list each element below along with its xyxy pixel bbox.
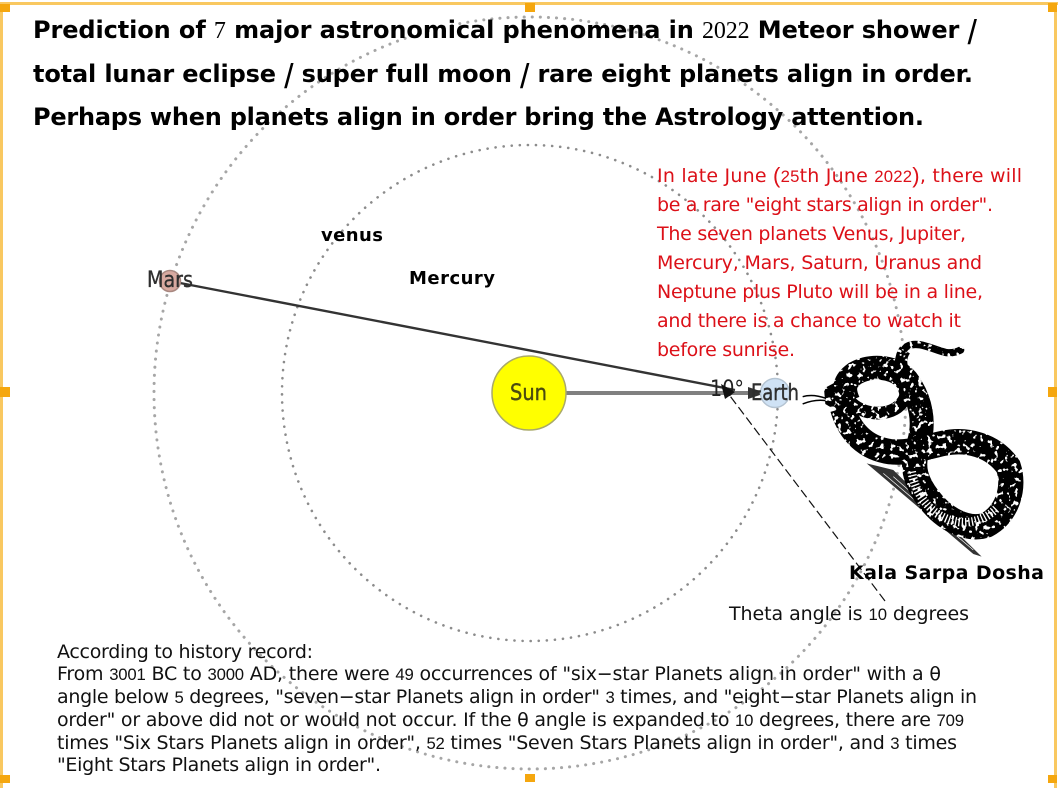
upper coil (845, 368, 922, 443)
red description text: before sunrise. (657, 339, 795, 361)
title: total lunar eclipse (33, 60, 276, 88)
line: Sun to Earth (566, 387, 766, 399)
red description text: The seven planets Venus, Jupiter, (656, 223, 966, 245)
red description text: ) (912, 163, 920, 188)
dashed pointer arrow to angle (721, 384, 885, 601)
red description text: be a rare "eight stars align in order". (657, 194, 993, 216)
title: / (284, 58, 294, 96)
title: Prediction of 7 major astronomical phenomena in 2022 Meteor shower (33, 16, 959, 44)
red description text: In late June (657, 165, 767, 187)
red description text: 25 (781, 167, 799, 186)
red description text: Mercury, Mars, Saturn, Uranus and (657, 252, 982, 274)
red description text: Neptune plus Pluto will be in a line, (657, 281, 983, 303)
history text block: angle below 5 degrees, "seven−star Planets align in order" 3 times, and "eight−star Planets align in (57, 686, 977, 708)
inner thin ring (847, 387, 906, 413)
label: Kala Sarpa Dosha: Kala Sarpa Dosha (849, 562, 1044, 584)
title: super full moon (293, 60, 520, 88)
ventral fringe (867, 463, 982, 557)
history text block: times "Six Stars Planets align in order", 52 times "Seven Stars Planets align in order", and 3 times (57, 732, 957, 754)
red description text: , there will (920, 165, 1022, 187)
planet: Mars: Mars (147, 268, 193, 293)
inner orbit: mercury (282, 145, 778, 641)
belly scales (912, 472, 997, 522)
history text block: From 3001 BC to 3000 AD, there were 49 occurrences of "six−star Planets align in order" with a θ (57, 663, 941, 685)
label: venus: venus (321, 225, 383, 246)
planet: Earth: Earth (751, 381, 799, 406)
head (824, 382, 857, 415)
history text block: order" or above did not or would not occur. If the θ angle is expanded to 10 degrees, there are 709 (57, 709, 964, 731)
planet: Sun (492, 356, 566, 430)
title: / (968, 14, 978, 52)
red description text (656, 163, 1022, 361)
label: Mercury: Mercury (409, 268, 495, 289)
history text block: According to history record: (57, 641, 313, 663)
planet: Sun: Sun (510, 381, 547, 406)
history text block: "Eight Stars Planets align in order". (57, 754, 381, 776)
red description text: ( (773, 163, 781, 188)
title: Perhaps when planets align in order bring the Astrology attention. (33, 103, 924, 131)
title: rare eight planets align in order. (529, 60, 973, 88)
main body and lower loop (843, 408, 1011, 527)
red description text: th June 2022 (800, 165, 912, 187)
outer orbit: venus (154, 17, 906, 769)
label: theta angle: Theta angle is 10 degrees (728, 603, 969, 625)
history text block (57, 641, 977, 776)
line: Mars to Earth side (180, 283, 735, 390)
tongue (803, 396, 826, 404)
tail (900, 344, 961, 387)
title (33, 14, 978, 131)
red description text: and there is a chance to watch it (657, 310, 961, 332)
title: / (520, 58, 530, 96)
angle label: 10° (710, 377, 744, 402)
illustration: snake (803, 344, 1011, 557)
